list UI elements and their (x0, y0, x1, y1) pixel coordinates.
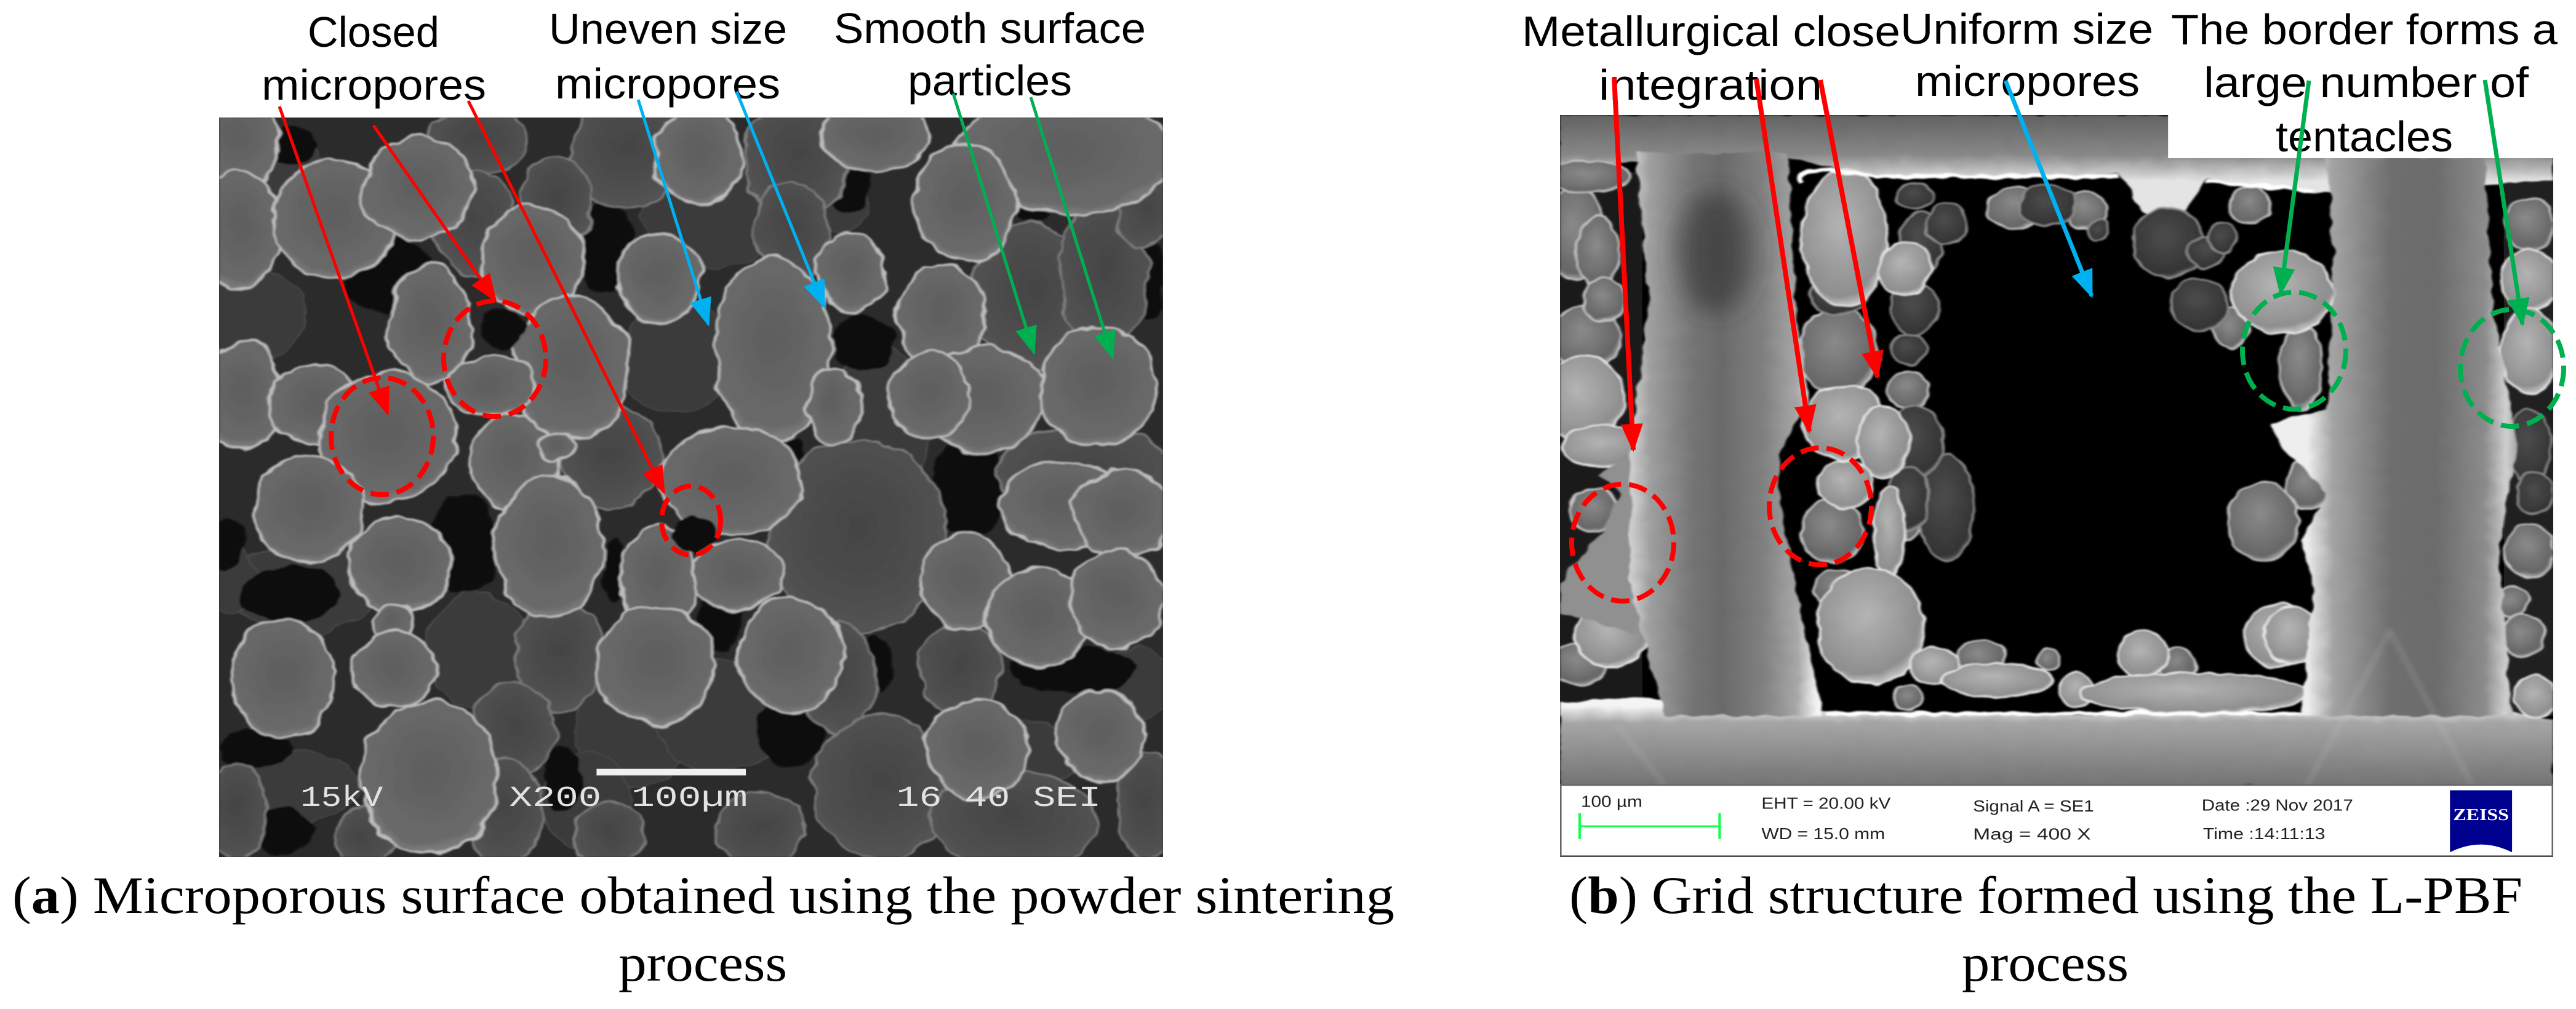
arrows: closed micropores (279, 101, 664, 492)
dashed circles: metallurgical integration (1572, 448, 1871, 601)
heading: border forms tentacles: The border forms a (2171, 6, 2558, 54)
icon: ZEISS logo: ZEISS (2453, 805, 2509, 824)
instrument text: WD = 15.0 mm (1761, 824, 1885, 843)
instrument text: Time :14:11:13 (2203, 824, 2325, 843)
SEM caption: 15kV (300, 783, 383, 815)
panel: powder sintering micrograph (196, 93, 1179, 871)
left column (1631, 153, 1823, 716)
heading: uneven size micropores: Uneven size (549, 5, 787, 53)
SEM caption (300, 783, 1101, 815)
heading: closed micropores: micropores (262, 61, 486, 109)
heading: uniform size micropores: micropores (1915, 57, 2140, 105)
dashed circles: closed micropores (331, 301, 721, 555)
heading: smooth surface particles: Smooth surface (834, 4, 1146, 52)
top band (1560, 115, 2553, 217)
SEM caption: 16 40 SEI (897, 783, 1101, 815)
caption: panel b (1569, 866, 2522, 992)
left column branch (1560, 446, 1674, 636)
caption: panel b: (b) Grid structure formed using the L-PBF (1569, 866, 2522, 925)
SEM scale bar (596, 769, 746, 775)
caption: panel a (12, 866, 1394, 992)
white cutout behind label (2168, 115, 2553, 158)
bottom band (1560, 697, 2553, 787)
heading: border forms tentacles: large number of (2204, 58, 2529, 106)
pores inside circles (479, 308, 719, 549)
bright rim of the pore (1799, 170, 2314, 714)
caption: panel b: process (1962, 933, 2129, 992)
right column (2270, 158, 2518, 716)
SEM caption: X200 (510, 783, 601, 815)
column base ridge lines (1617, 631, 2472, 784)
heading: metallurgical close integration (1522, 7, 1900, 109)
heading: smooth surface particles (834, 4, 1146, 105)
heading: closed micropores: Closed (308, 8, 439, 56)
icon: ZEISS logo (2450, 791, 2512, 852)
arrows: tentacles (2281, 80, 2522, 324)
instrument text: Date :29 Nov 2017 (2202, 796, 2353, 815)
heading: uniform size micropores: Uniform size (1900, 5, 2153, 53)
arrows: metallurgical integration (1614, 78, 1878, 450)
heading: uniform size micropores (1900, 5, 2153, 105)
instrument text: Signal A = SE1 (1973, 797, 2094, 815)
caption: panel a: process (618, 933, 787, 992)
instrument text: EHT = 20.00 kV (1761, 794, 1891, 812)
instrument text: Mag = 400 X (1973, 825, 2091, 843)
heading: smooth surface particles: particles (908, 57, 1072, 105)
dark background around particles (1560, 172, 2553, 716)
instrument text (1581, 792, 2353, 843)
instrument text: 100 µm (1581, 792, 1642, 810)
column shading (1681, 191, 1750, 314)
heading: metallurgical close integration: integration (1599, 61, 1822, 109)
heading: metallurgical close integration: Metallurgical close (1522, 7, 1900, 55)
scale bar (1580, 813, 1719, 839)
caption: panel a: (a) Microporous surface obtained using the powder sintering (12, 866, 1394, 925)
arrows: uneven micropores (638, 92, 824, 324)
arrows: smooth particles (953, 94, 1113, 357)
particles (1546, 161, 2554, 711)
SEM caption: 100µm (631, 783, 748, 815)
instrument info bar (1561, 785, 2553, 856)
arrow: uniform micropores (2006, 81, 2092, 296)
heading: closed micropores (262, 8, 486, 109)
panel: L-PBF grid structure micrograph (1540, 115, 2558, 857)
heading: border forms tentacles: tentacles (2276, 113, 2453, 161)
heading: border forms tentacles (2171, 6, 2558, 161)
dashed circles: tentacles (2242, 292, 2564, 426)
dark pockets between particles (210, 127, 1164, 853)
heading: uneven size micropores: micropores (555, 60, 780, 108)
heading: uneven size micropores (549, 5, 787, 108)
